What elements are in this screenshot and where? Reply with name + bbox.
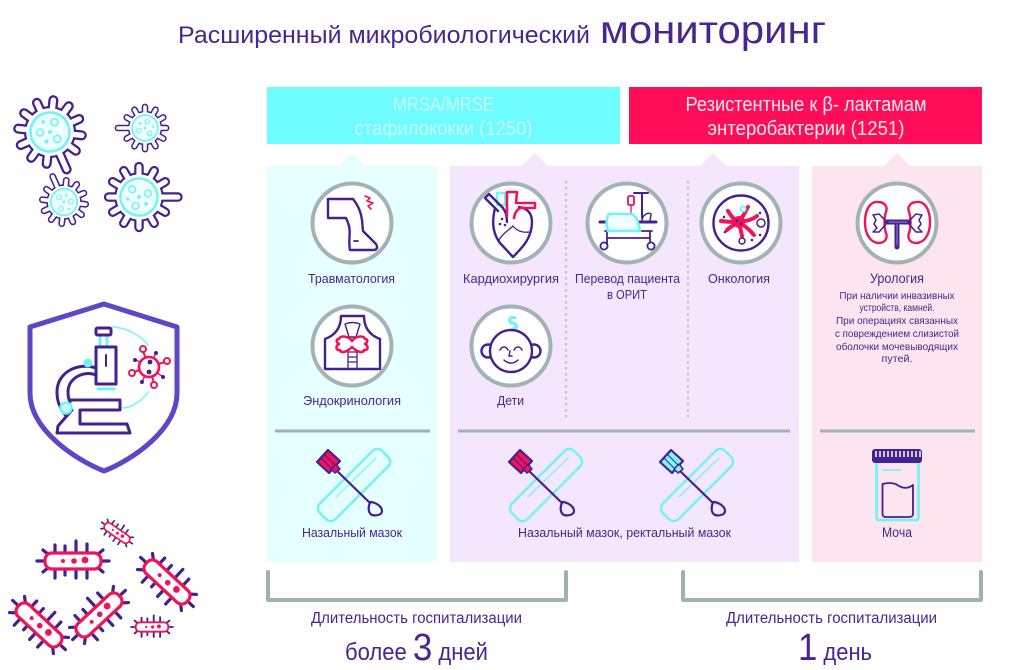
note line 5: оболочки мочевыводящих: [836, 341, 958, 353]
bacterium bottom small: [131, 615, 173, 637]
note line 4: с повреждением слизистой: [835, 329, 959, 340]
label: ICU transfer: [575, 271, 681, 302]
label line two: в ОРИТ: [607, 287, 647, 302]
bacterium right: [129, 543, 207, 619]
label: nasal and rectal swab: Назальный мазок, ректальный мазок: [518, 525, 731, 540]
label: cardiac surgery: Кардиохирургия: [463, 271, 559, 286]
panel: cyan column: [267, 153, 437, 562]
bacterium top small: [97, 514, 138, 551]
label: nasal swab: Назальный мазок: [302, 525, 402, 540]
panel: pink column: [812, 153, 982, 562]
virus small bottom left: [39, 172, 88, 226]
icon: shield with microscope: [30, 304, 177, 471]
icon: swab red, cyan panel: [315, 446, 393, 524]
icon: oncology cell: [702, 184, 780, 262]
title: emphasised word: мониторинг: [600, 9, 826, 52]
duration value: 1 day: 1 день: [798, 627, 872, 669]
label: traumatology: Травматология: [308, 271, 395, 286]
icon: traumatology leg: [312, 184, 392, 262]
header: MRSA/MRSE: [267, 87, 620, 144]
note line 2: устройств, камней.: [860, 303, 934, 314]
bracket: left: [268, 572, 566, 600]
icon: ICU bed: [588, 184, 666, 262]
icon: kidneys: [858, 184, 936, 262]
illustration: bacteria: [1, 514, 207, 662]
header text line one: Резистентные к β- лактамам: [686, 94, 926, 116]
label: endocrinology: Эндокринология: [303, 393, 401, 408]
divider rules: [275, 430, 975, 432]
icon: child face: [472, 306, 550, 386]
duration caption: Длительность госпитализации: [311, 610, 522, 627]
header text line one: MRSA/MRSE: [393, 94, 494, 116]
icon: swab red, purple panel: [507, 446, 585, 524]
virus large top left: [15, 97, 87, 176]
cyan arcs: [113, 327, 148, 408]
header text line two: стафилококки (1250): [354, 118, 532, 140]
illustration: viruses: [15, 97, 183, 235]
shield outline: [30, 304, 177, 471]
note line 1: При наличии инвазивных: [840, 291, 954, 302]
duration value: more than 3 days: более 3 дней: [345, 627, 488, 669]
icon: swab cyan, purple panel: [658, 446, 736, 524]
duration: right: [726, 610, 937, 669]
label: urine: Моча: [882, 525, 912, 540]
label line one: Перевод пациента: [575, 271, 681, 286]
text block: urology note: [835, 291, 959, 365]
duration: left: [311, 610, 522, 669]
virus large bottom right: [103, 161, 183, 235]
bacterium lower left: [1, 586, 79, 662]
bracket: right: [683, 572, 981, 600]
virus small top right: [114, 102, 170, 153]
microscope: [57, 328, 130, 433]
bacterium lower middle: [59, 576, 137, 652]
virus under microscope: [129, 346, 170, 388]
note line 3: При операциях связанных: [836, 316, 958, 327]
note line 6: путей.: [882, 354, 912, 365]
header: enterobacteria: [629, 87, 982, 144]
label: children: Дети: [497, 393, 524, 408]
bacterium horizontal: [37, 541, 109, 578]
title: first part: Расширенный микробиологический: [178, 22, 590, 49]
duration caption: Длительность госпитализации: [726, 610, 937, 627]
label: oncology: Онкология: [708, 271, 770, 286]
title: [178, 9, 826, 52]
icon: urine container: [872, 450, 922, 520]
icon: cardiac surgery heart: [472, 184, 550, 262]
panel: purple column: [450, 153, 799, 562]
dotted column dividers: [566, 181, 688, 418]
label: urology: Урология: [870, 271, 924, 286]
header text line two: энтеробактерии (1251): [708, 118, 904, 140]
icon: endocrinology thyroid: [312, 306, 392, 386]
